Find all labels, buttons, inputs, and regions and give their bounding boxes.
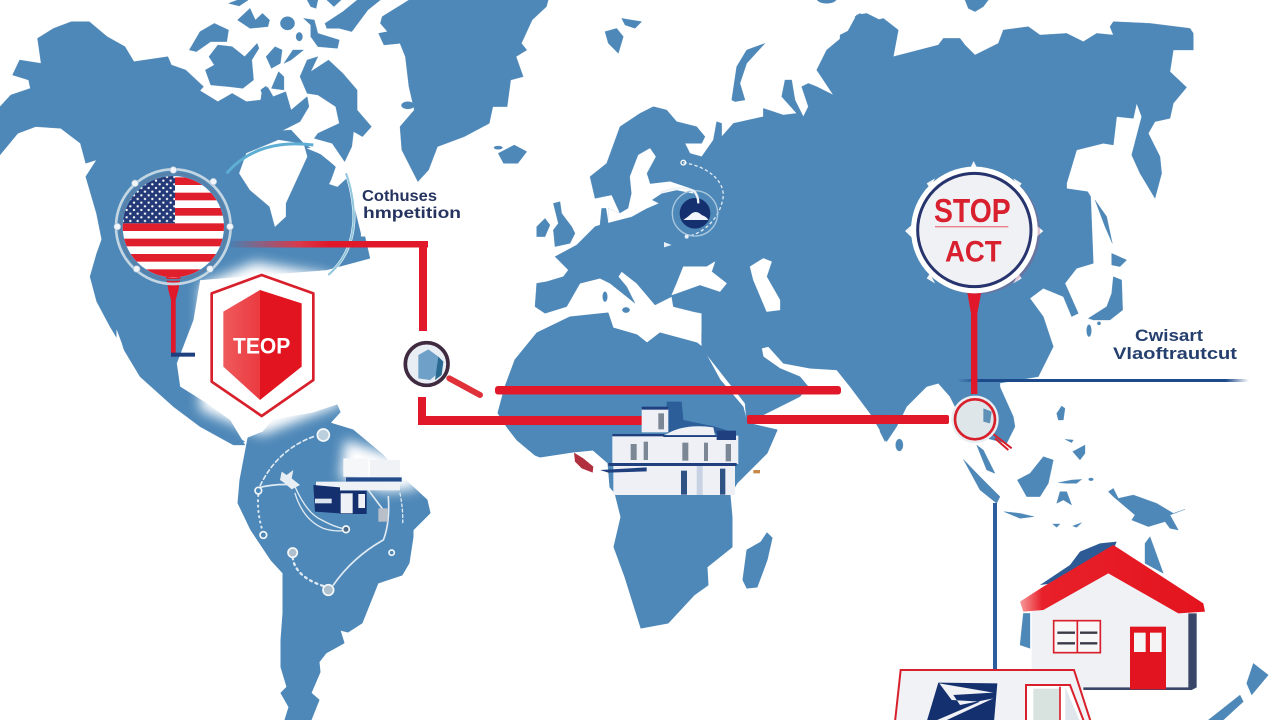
Europe curve [660,188,698,203]
badge divider [935,225,1008,229]
small truck [313,458,402,514]
label: top left text: hmpetition [363,205,461,222]
network nodes [255,429,394,595]
building navy trims [600,407,737,473]
pin stem [166,277,195,357]
map: Africa [498,313,777,628]
USA flag pin [114,167,233,357]
white glow over South America [340,440,420,492]
map: Siberia and Kamchatka [840,13,1193,233]
map: Europe and West Asia [535,0,880,347]
route: lower vertical [418,397,426,425]
STOP ACT pin [905,161,1043,394]
building icon [574,402,760,495]
red coast mark [574,453,593,473]
badge circle [911,167,1038,293]
badge text STOP: STOP [934,192,1011,229]
shield right half [260,290,302,400]
South America route network [255,429,403,595]
badge compass tips [905,161,1043,283]
flag ring [116,169,231,284]
map: Southeast Asia islands and Oceania [880,400,1268,720]
map: Central America [220,417,245,442]
building doors [681,469,725,495]
label: right text [1113,326,1237,363]
route: lower right line [747,415,949,424]
map: white seas of Eurasia [608,148,780,312]
map: Lower North America [90,237,370,445]
route: top horizontal [230,241,428,248]
map: South America [238,405,430,720]
white glow behind shield [200,262,340,435]
building body [612,408,738,495]
flag [120,173,227,280]
route: upper Africa line [495,386,841,394]
network junction box [378,508,388,522]
label: right text: Vlaoftrautcut [1113,344,1237,363]
label: right text: Cwisart [1135,326,1203,345]
house roof [1020,545,1205,613]
map: North America and Arctic [0,0,414,240]
blue vertical line [993,503,997,671]
map: Japan and Sakhalin [1087,200,1127,337]
network routes [258,437,403,586]
Europe cloud [683,212,708,220]
magnifier: left [405,343,480,395]
shield left half [223,290,260,400]
ring nodes [114,167,233,272]
orange mark [753,470,760,473]
route: right vertical top [419,241,427,331]
map: South Asia and Arabia [702,280,1000,442]
shield text: TEOP [233,333,290,358]
label: top left text: Cothuses [362,188,437,205]
red route lines [230,241,949,425]
USPS logo [927,683,997,720]
house wall [1032,572,1188,689]
mail truck [895,670,1091,720]
badge text ACT: ACT [945,236,1002,269]
badge shadow [915,169,1040,294]
Europe dashed route [683,163,723,237]
magnifier: right [953,397,1012,450]
truck body [895,670,1091,720]
label: top left text [362,188,461,222]
house right edge [1083,613,1197,690]
house window [1054,621,1100,653]
map: Arctic island north of Siberia [965,0,988,12]
house dark roof edge [1040,542,1117,585]
Europe rings [672,191,718,236]
network hub [280,470,300,489]
building column [697,466,703,495]
house door [1130,627,1166,689]
Europe navy disc [680,198,710,229]
building shadow [667,402,737,433]
map: Greenland and Iceland [379,0,548,182]
blue arc [227,144,354,275]
map: East Asia and Indochina [880,117,1093,443]
shield badge [212,275,313,416]
house [1020,542,1205,690]
truck cab window [1026,685,1084,720]
building windows [631,413,731,461]
route: lower horizontal [418,416,642,425]
pin stem [966,285,983,394]
shield outline [212,275,313,416]
Europe icon [660,160,723,247]
map: Madagascar [743,533,772,588]
navy horizontal line [957,379,1249,382]
